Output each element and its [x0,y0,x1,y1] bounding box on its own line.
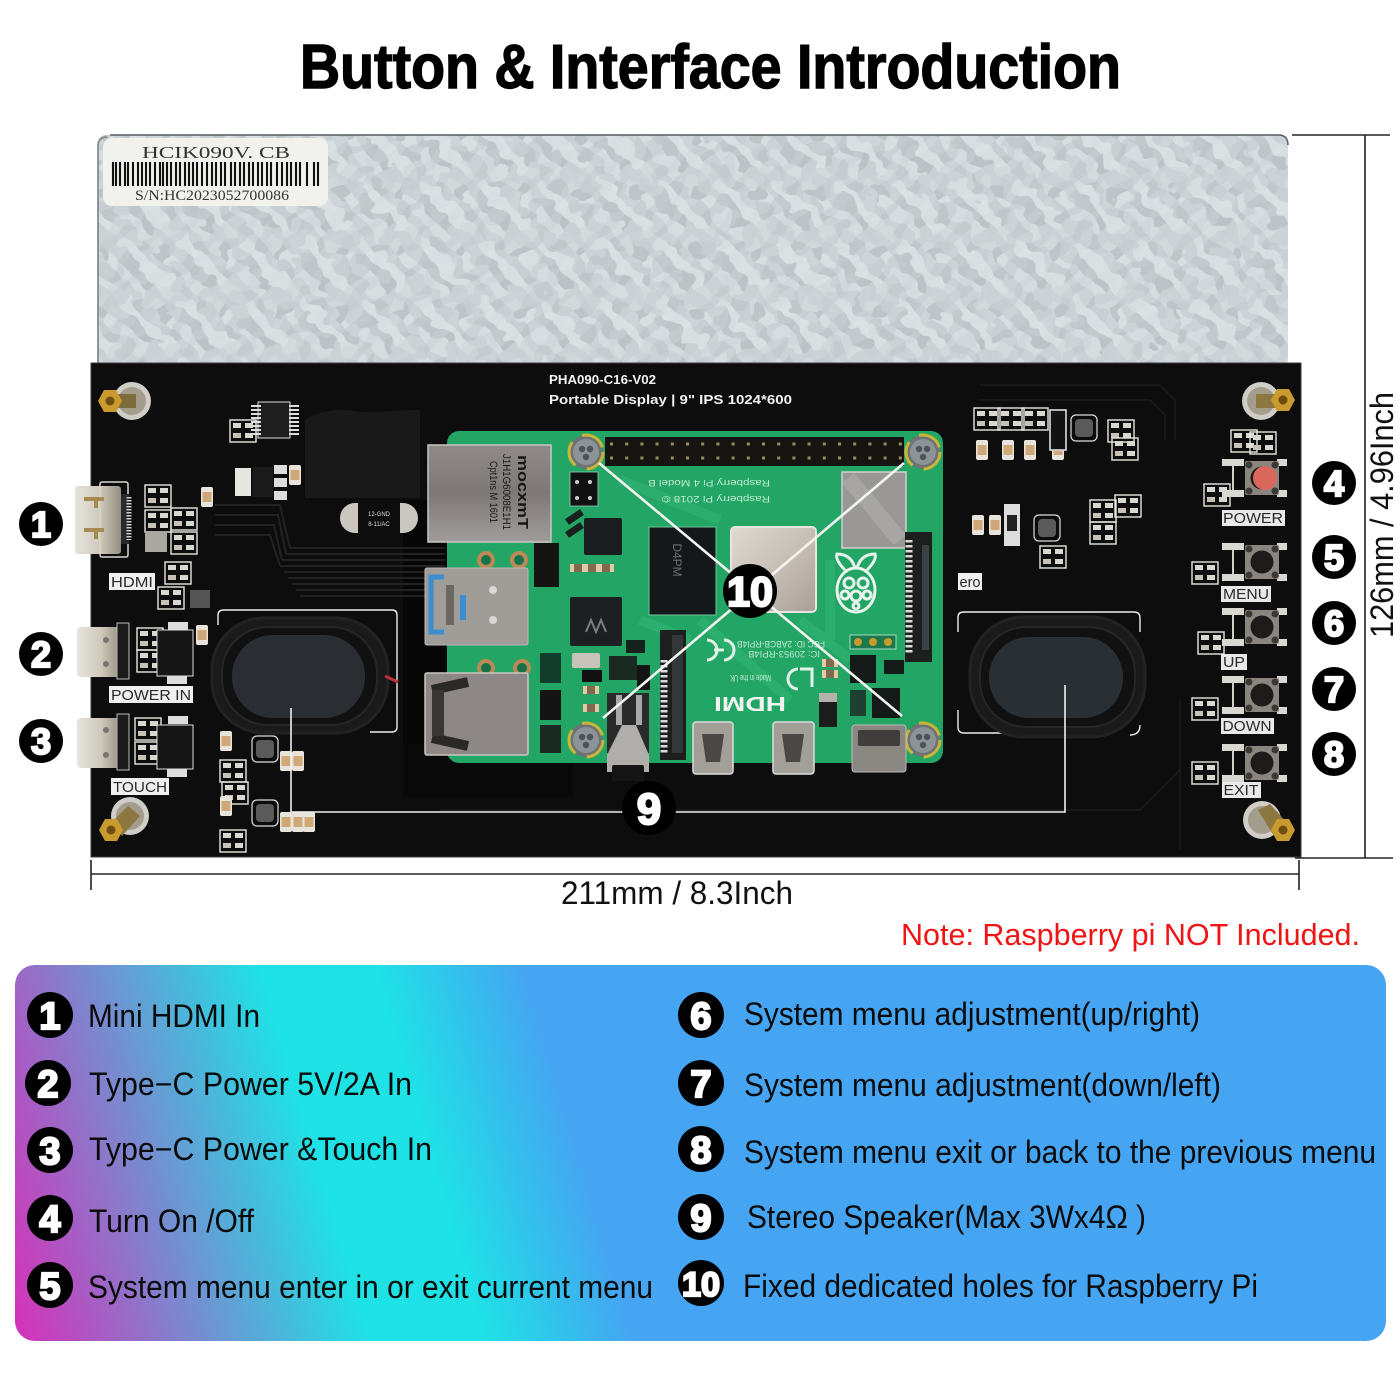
legend 2: 2 [37,1064,59,1106]
small passive parts [540,564,904,753]
slot hole: 8-11/AC [368,522,390,528]
callout 6: 6 [1324,603,1344,644]
legend 4: 4 [39,1199,61,1241]
legend 3: Type−C Power &Touch In [89,1131,432,1167]
button labels: POWER [1223,510,1283,527]
button labels: MENU [1223,586,1269,603]
callout 9 [622,781,676,835]
buttons [1222,459,1287,782]
board print: Made in the UK [730,673,771,683]
barcode label: S/N:HC2023052700086 [135,188,290,204]
USB-C power port [852,725,906,772]
legend 10: Fixed dedicated holes for Raspberry Pi [743,1268,1258,1304]
legend 5: System menu enter in or exit current menu [88,1269,653,1305]
ethernet port [428,445,551,542]
mini HDMI connector [75,482,129,557]
title: Button & Interface Introduction [300,33,1121,102]
board print: FCC ID: 2ABCB-RPI4B [737,639,825,649]
callout 7 [1312,667,1356,711]
Raspberry Pi board [425,431,943,781]
ethernet port: J1H1G6008E1H1 [500,454,512,530]
callout 5: 5 [1324,537,1344,578]
legend 5 [27,1262,653,1308]
port labels: ero [960,574,980,591]
board print [648,478,825,683]
legend 8: 8 [690,1130,712,1172]
USB-C connector: power [77,623,129,679]
width dimension [91,860,1299,911]
display and camera ribbon connectors [660,532,932,760]
callout 1 [19,502,63,546]
USB 3 port [425,568,528,645]
legend 10: 10 [682,1266,720,1304]
board silkscreen text: Portable Display | 9" IPS 1024*600 [549,392,792,407]
WiFi shield [842,472,906,548]
legend 10 [678,1260,1258,1306]
USB 2 port [425,673,528,755]
board print: Raspberry Pi 2018 © [662,494,770,504]
audio jack [607,693,649,781]
legend 4: Turn On /Off [89,1203,254,1239]
callout 1: 1 [31,504,51,545]
button labels: DOWN [1222,718,1272,735]
controller chips [534,512,622,646]
board silkscreen text: PHA090-C16-V02 [549,372,656,387]
callout 7: 7 [1324,669,1344,710]
callout 8 [1312,732,1356,776]
legend 3: 3 [39,1131,61,1173]
USB-C connector: touch [77,714,129,770]
callout lines to Raspberry Pi holes [599,463,904,718]
legend 1: 1 [39,996,61,1038]
port labels [109,573,982,796]
callout 3 [19,719,63,763]
height dimension: 126mm / 4.96Inch [1364,392,1400,638]
button labels: EXIT [1224,782,1258,799]
legend 8 [678,1126,1376,1172]
board print: IC: 20953-RPI4B [748,649,820,659]
callout 3: 3 [31,721,51,762]
legend 2 [25,1060,412,1106]
GPIO status pads [850,635,896,649]
height dimension [1292,135,1400,858]
callout 9: 9 [637,785,661,834]
SoC heat spreader [731,527,816,612]
callout 2 [19,632,63,676]
callout line to both speakers [291,685,1065,812]
legend 7 [678,1060,1221,1106]
ethernet port: mocxmT [514,455,531,529]
legend 1 [27,992,260,1038]
legend 9: Stereo Speaker(Max 3Wx4Ω ) [747,1199,1146,1235]
port labels: POWER IN [111,687,191,704]
width dimension: 211mm / 8.3Inch [561,875,793,911]
legend 6: System menu adjustment(up/right) [744,996,1200,1032]
legend panel [15,965,1386,1341]
legend 1: Mini HDMI In [88,998,260,1034]
legend 6 [678,992,1200,1038]
legend 9: 9 [690,1198,712,1240]
CE and FCC marks [707,640,812,689]
speaker: right [958,612,1145,737]
callout 6 [1312,601,1356,645]
raspberry logo [837,554,875,612]
callout 4 [1312,461,1356,505]
callout 2: 2 [31,634,51,675]
copper through holes [479,553,529,675]
legend 7: 7 [690,1064,712,1106]
slot hole: 12-GND [368,512,391,518]
surface mount components, right [972,408,1276,784]
legend 2: Type−C Power 5V/2A In [89,1066,412,1102]
legend 8: System menu exit or back to the previous menu [744,1134,1376,1170]
legend 6: 6 [690,996,712,1038]
J14 header [570,472,598,506]
callout 8: 8 [1324,734,1344,775]
legend 7: System menu adjustment(down/left) [744,1067,1221,1103]
driver circuit board [75,363,1301,857]
legend 9 [678,1194,1146,1240]
speaker: left [212,610,398,733]
board silkscreen text [549,372,792,407]
callout 5 [1312,535,1356,579]
mounting screws [569,435,940,757]
RAM chip: D4PM [670,543,684,577]
micro HDMI ports [693,722,814,774]
legend 4 [27,1195,254,1241]
port labels: TOUCH [113,779,167,796]
callout 4: 4 [1324,463,1344,504]
HDMI print: HDMI [714,692,786,714]
barcode label [103,138,328,206]
legend 5: 5 [39,1266,61,1308]
callout 10: 10 [727,568,773,615]
button labels [1221,510,1285,799]
note: Note: Raspberry pi NOT Included. [901,917,1360,952]
surface mount components, left [135,402,315,852]
mounting standoffs [98,382,1295,841]
ethernet port: Cpt1ns M 1601 [487,461,499,523]
RAM chip [649,527,716,615]
button labels: UP [1223,654,1245,671]
slot hole [340,503,418,533]
port labels: HDMI [111,574,153,591]
board print: Raspberry Pi 4 Model B [648,478,770,488]
GPIO header [605,437,904,466]
display back panel [97,134,1289,362]
barcode label: HCIK090V. CB [142,143,290,162]
legend 3 [27,1127,432,1173]
